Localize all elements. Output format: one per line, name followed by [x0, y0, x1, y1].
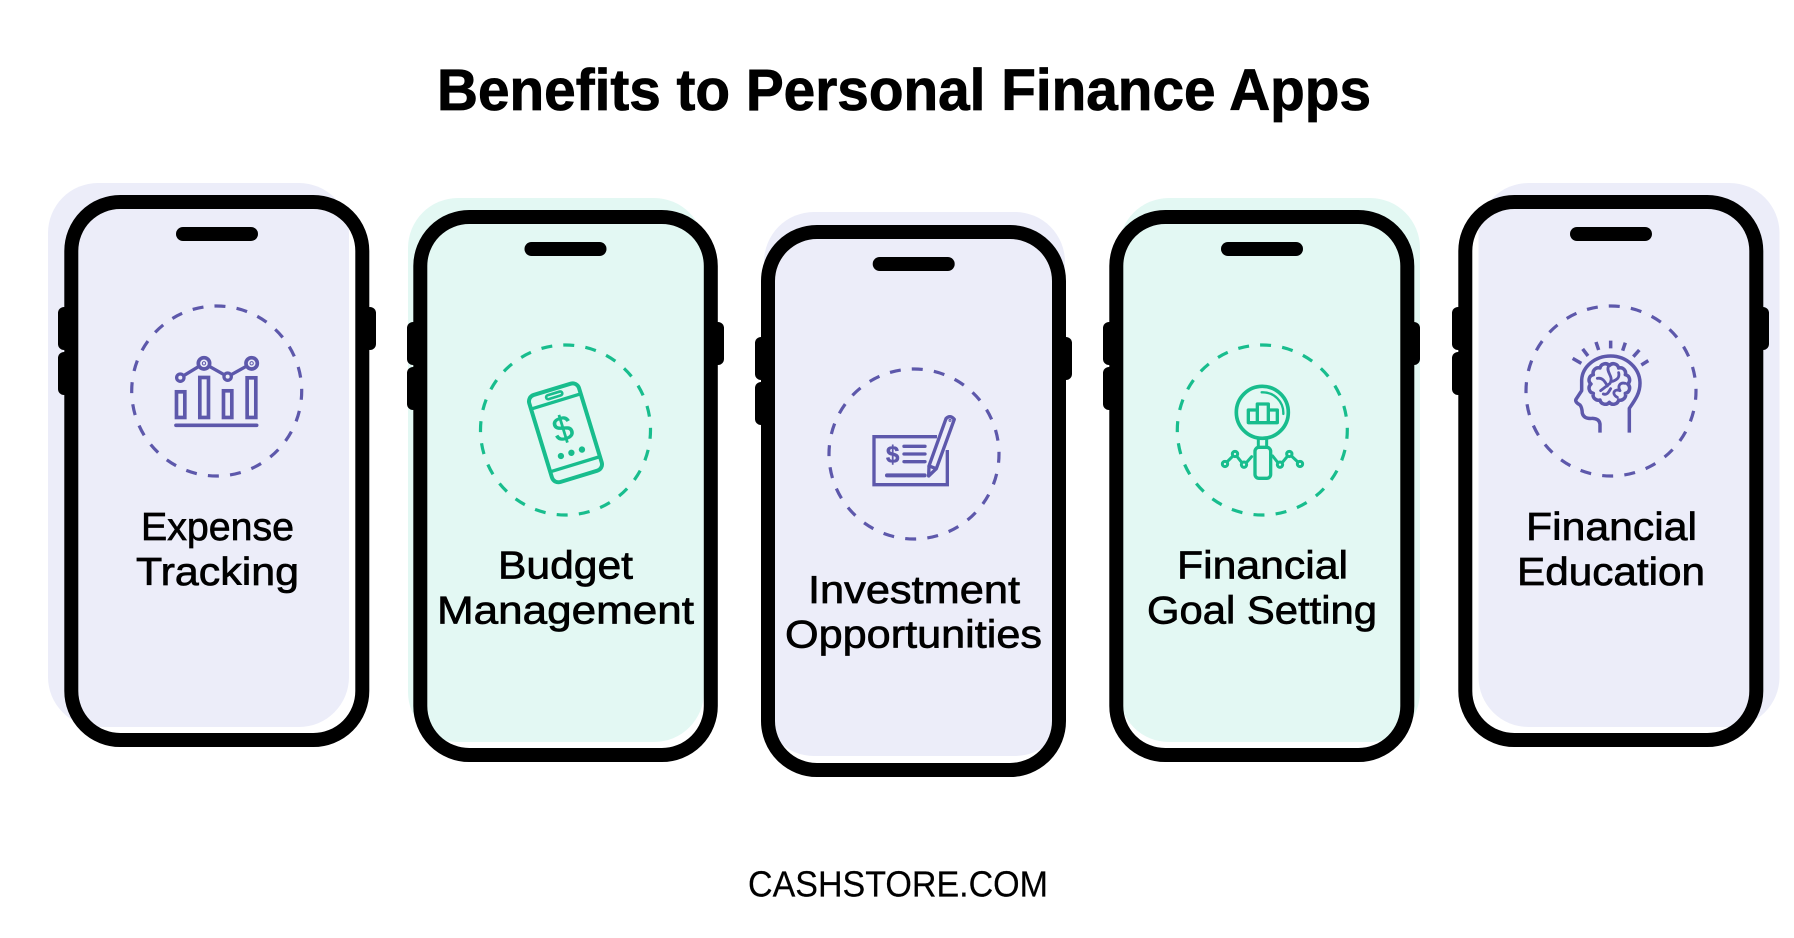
- panel: expense tracking phone: [48, 183, 376, 747]
- label: expense tracking: [136, 506, 299, 594]
- icon: magnifier over chart: [1222, 386, 1303, 478]
- label: budget management: Budget: [498, 544, 633, 588]
- icon: smartphone with dollar: $: [548, 408, 578, 451]
- panel: budget management phone: [407, 198, 724, 762]
- icon: cheque and pen: $: [886, 441, 899, 468]
- icon: bar chart with line: [176, 358, 257, 425]
- title: Benefits to Personal Finance Apps: [437, 58, 1371, 123]
- label: financial education: [1517, 506, 1705, 594]
- icon: head with brain: [1573, 341, 1648, 433]
- panel: financial goal setting phone: [1103, 198, 1420, 762]
- label: expense tracking: Tracking: [136, 551, 299, 594]
- label: investment opportunities: Opportunities: [785, 614, 1042, 656]
- label: budget management: Management: [437, 590, 694, 632]
- label: investment opportunities: [785, 569, 1042, 656]
- icon: cheque and pen: [874, 417, 954, 485]
- label: financial goal setting: Financial: [1177, 544, 1348, 588]
- label: financial goal setting: Goal Setting: [1147, 590, 1377, 632]
- footer: source: CASHSTORE.COM: [748, 864, 1048, 904]
- label: financial education: Education: [1517, 551, 1705, 594]
- label: expense tracking: Expense: [141, 506, 294, 549]
- label: financial education: Financial: [1526, 506, 1697, 549]
- panel: financial education phone: [1452, 183, 1780, 747]
- label: financial goal setting: [1147, 544, 1377, 632]
- icon: smartphone with dollar: [527, 382, 604, 484]
- label: budget management: [437, 544, 694, 632]
- panel: investment opportunities phone: [755, 212, 1072, 777]
- label: investment opportunities: Investment: [808, 569, 1020, 612]
